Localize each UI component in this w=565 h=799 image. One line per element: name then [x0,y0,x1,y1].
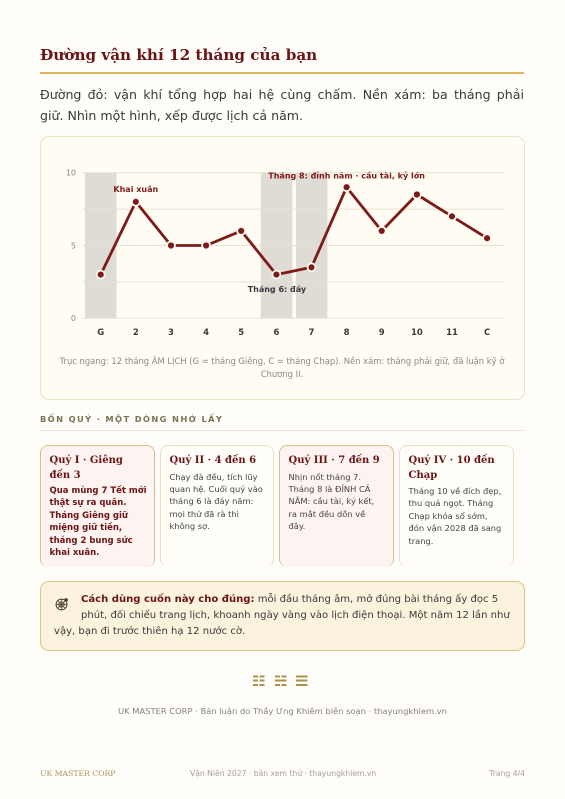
section heading: BỐN QUÝ · MỘT DÒNG NHỚ LẤY [40,414,223,424]
line chart: Khai xuân [113,185,158,194]
quarter II heading: Quý II · 4 đến 6 [170,454,256,466]
line chart: 9 [379,328,385,338]
title: Đường vận khí 12 tháng của bạn [40,46,317,64]
quarter III text: Tháng 8 là ĐỈNH CẢ [288,484,370,494]
quarter II text: Chạy đà đều, tích lũy [170,472,258,482]
icon: trigrams [253,676,308,686]
quarter II text: mọi thứ đã rà thì [170,509,239,519]
quarter IV heading: Quý IV · 10 đến [408,454,495,466]
line chart: 4 [203,328,209,338]
panel: quarter IV [399,445,514,567]
intro text: giữ. Nhìn một hình, xếp được lịch cả năm. [40,108,303,123]
quarter III text: ra mắt đều dồn về [288,509,365,519]
quarter III text: NĂM: cầu tài, ký kết, [288,496,374,506]
line chart: 3 [168,328,174,338]
section divider [40,430,524,431]
callout text: phút, đối chiếu trang lịch, khoanh ngày vàng vào lịch điện thoại. Một năm 12 lần như [81,610,510,621]
chart caption: Trục ngang: 12 tháng ÂM LỊCH (G = tháng Giêng, C = tháng Chạp). Nền xám: tháng phải giữ, đã luận kỹ ở Chương II. [60,356,504,379]
line chart: 7 [309,328,315,338]
line chart: 6 [273,328,279,338]
line chart: G [97,328,104,338]
quarter I text: thật sự ra quân. [50,498,126,508]
line chart: 5 [238,328,244,338]
callout text: Cách dùng cuốn này cho đúng: mỗi đầu tháng âm, mở đúng bài tháng ấy đọc 5 [81,594,498,605]
line chart: 10 [66,168,76,178]
quarter IV heading [408,454,495,480]
quarter I text [50,485,147,558]
footer: brand: UK MASTER CORP [40,769,115,778]
quarter II text: quan hệ. Cuối quý vào [170,484,263,494]
intro text: Đường đỏ: vận khí tổng hợp hai hệ cùng chấm. Nền xám: ba tháng phải [40,87,524,102]
quarter I text: khai xuân. [50,548,99,558]
panel: quarter I [40,445,155,567]
quarter IV text: thu quả ngọt. Tháng [408,498,493,508]
quarter IV text: Tháng 10 về đích đẹp, [408,486,501,496]
quarter IV text [408,486,501,546]
quarter IV text: Chạp khóa sổ sớm, [408,511,488,521]
quarter II text: không sợ. [170,521,210,531]
line chart: 0 [71,314,76,323]
quarter IV heading: Chạp [408,470,437,480]
panel: callout [40,581,525,651]
line chart: 2 [133,328,139,338]
quarter IV text: đón vận 2028 đã sang [408,523,501,533]
panel: quarter III [279,445,394,567]
title underline [40,72,524,74]
line chart: Tháng 8: đỉnh năm · cầu tài, kỷ lớn [268,170,425,180]
quarter III text: đây. [288,521,305,531]
quarter I heading: Quý I · Giêng [50,454,123,466]
line chart: 5 [71,241,76,250]
panel: chart [40,136,525,400]
quarter I heading: đến 3 [50,470,81,480]
quarter I text: Tháng Giêng giữ [50,510,128,520]
quarter II text: tháng 6 là đáy năm: [170,496,253,506]
quarter I text: tháng 2 bung sức [50,536,133,546]
quarter III text [288,472,374,531]
source line: UK MASTER CORP · Bản luận do Thầy Ưng Khiêm biên soạn · thayungkhiem.vn [118,706,447,716]
footer: center: Vận Niên 2027 · bản xem thử · thayungkhiem.vn [190,769,376,778]
line chart: C [484,328,490,338]
line chart: 8 [344,328,350,338]
quarter I heading [50,454,123,480]
icon: compass [56,598,68,610]
quarter II text [170,472,263,531]
quarter I text: miệng giữ tiền, [50,523,122,533]
quarter III text: Nhịn nốt tháng 7. [288,472,361,482]
line chart: 10 [411,328,423,338]
quarter I text: Qua mùng 7 Tết mới [50,486,147,496]
footer: page number: Trang 4/4 [489,769,525,778]
line chart: 11 [446,328,458,338]
intro text [40,87,524,123]
quarter IV text: trang. [408,536,433,546]
callout text [81,593,510,621]
callout text last line: vậy, bạn đi trước thiên hạ 12 nước cờ. [54,626,245,637]
line chart: Tháng 6: đáy [248,285,307,294]
line chart [66,168,505,338]
panel: quarter II [160,445,274,567]
quarter III heading: Quý III · 7 đến 9 [288,454,380,466]
